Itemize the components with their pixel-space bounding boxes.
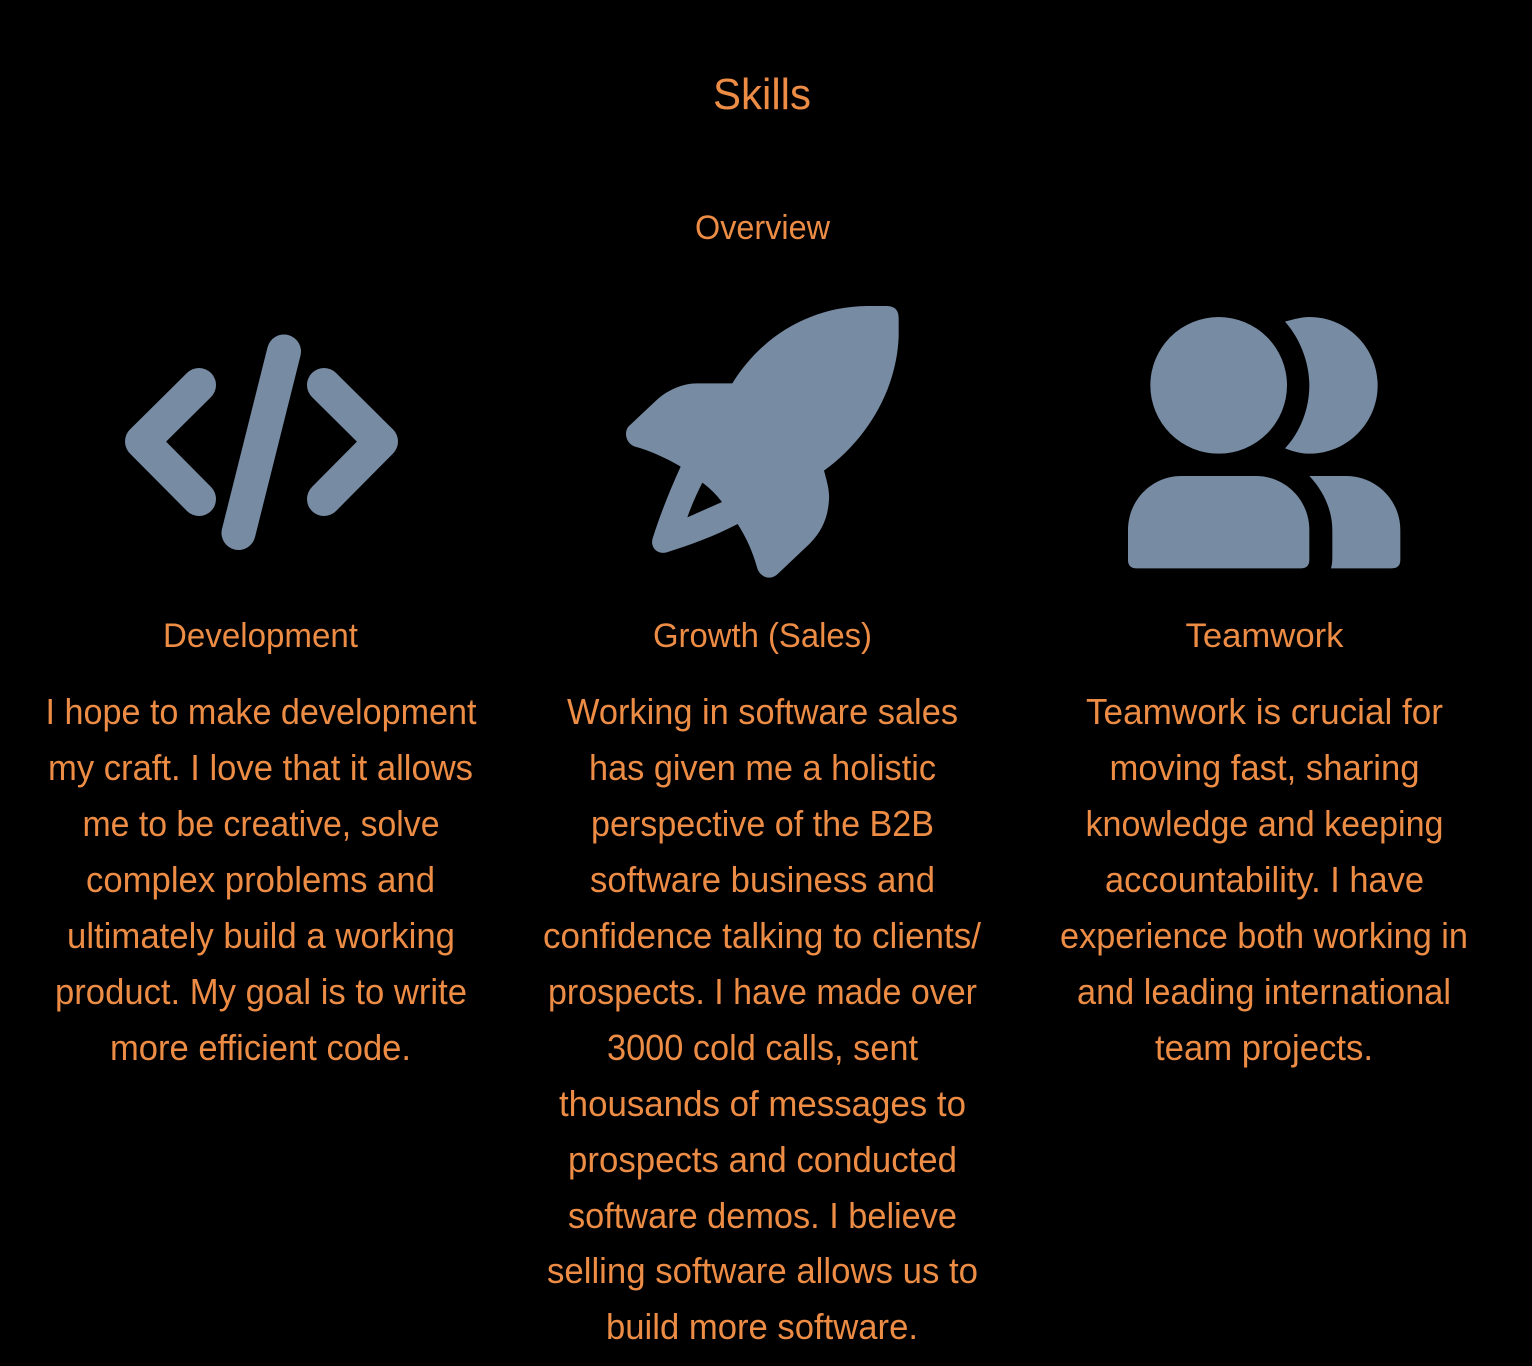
- text block: development: more efficient code.: [110, 1027, 411, 1068]
- heading: teamwork: Teamwork: [1186, 617, 1345, 655]
- text block: growth (sales): confidence talking to clients/: [543, 915, 981, 956]
- text block: development: product. My goal is to write: [55, 971, 467, 1012]
- text block: teamwork: accountability. I have: [1105, 859, 1424, 900]
- panel: growth (sales): [543, 306, 981, 1347]
- heading: development: Development: [163, 617, 359, 655]
- icon: code brackets: [142, 352, 381, 533]
- icon: people: [1128, 317, 1400, 568]
- text block: development: ultimately build a working: [67, 915, 455, 956]
- text block: growth (sales): selling software allows us to: [547, 1250, 978, 1291]
- text block: development: I hope to make development: [46, 691, 476, 732]
- text block: growth (sales): has given me a holistic: [589, 747, 936, 788]
- text block: growth (sales): build more software.: [606, 1306, 918, 1347]
- text block: development: complex problems and: [86, 859, 435, 900]
- text block: teamwork: and leading international: [1077, 971, 1451, 1012]
- text block: growth (sales): perspective of the B2B: [591, 803, 934, 844]
- text block: growth (sales): prospects. I have made over: [548, 971, 977, 1012]
- text block: teamwork: team projects.: [1155, 1027, 1373, 1068]
- title: Skills: [713, 70, 811, 119]
- text block: growth (sales): prospects and conducted: [568, 1139, 957, 1180]
- text block: growth (sales): thousands of messages to: [559, 1083, 966, 1124]
- text block: teamwork: experience both working in: [1060, 915, 1468, 956]
- text block: teamwork: knowledge and keeping: [1086, 803, 1444, 844]
- panel: development: [46, 352, 476, 1068]
- text block: growth (sales): 3000 cold calls, sent: [607, 1027, 918, 1068]
- text block: development: [46, 691, 476, 1068]
- text block: teamwork: moving fast, sharing: [1110, 747, 1420, 788]
- text block: teamwork: Teamwork is crucial for: [1086, 691, 1443, 732]
- heading: growth (sales): Growth (Sales): [653, 617, 872, 655]
- text block: development: me to be creative, solve: [82, 803, 440, 844]
- text block: growth (sales): Working in software sales: [567, 691, 958, 732]
- subtitle: overview: Overview: [695, 209, 830, 247]
- text block: development: my craft. I love that it allows: [48, 747, 473, 788]
- text block: growth (sales): software demos. I believe: [568, 1195, 957, 1236]
- text block: teamwork: [1060, 691, 1468, 1068]
- icon: rocket: [626, 306, 899, 578]
- text block: growth (sales): software business and: [590, 859, 935, 900]
- text block: growth (sales): [543, 691, 981, 1347]
- panel: teamwork: [1060, 317, 1468, 1068]
